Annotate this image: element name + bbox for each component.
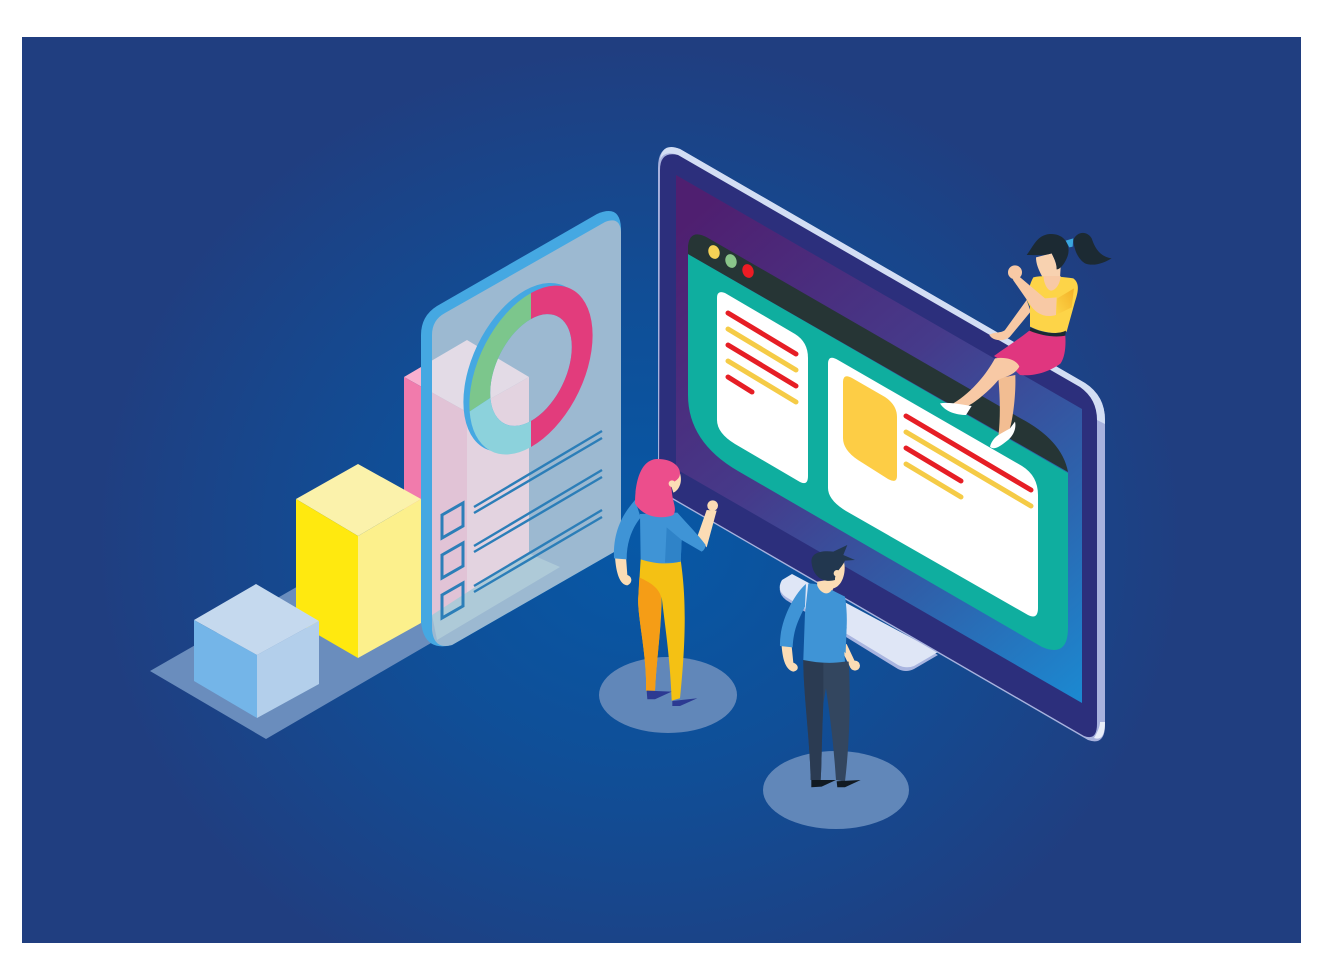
browser window (688, 234, 1068, 650)
window teal body (688, 254, 1068, 650)
person: man (780, 545, 861, 787)
window control dots (706, 244, 756, 279)
sitter skirt (994, 331, 1066, 375)
sitter lower leg (998, 375, 1015, 437)
monitor top highlight (660, 147, 1105, 424)
woman pants (638, 559, 685, 701)
woman right forearm (697, 510, 717, 547)
checkbox 3 and lines (442, 510, 602, 618)
man shoes (811, 780, 861, 787)
panel: translucent document (421, 211, 621, 646)
donut green segment (469, 293, 531, 412)
donut blue edge (463, 256, 587, 479)
donut cyan segment (470, 375, 531, 482)
floor disc: woman (599, 657, 737, 733)
checkbox 2 and lines (442, 470, 602, 578)
sitter raised arm (1013, 277, 1057, 316)
man hair (811, 545, 855, 581)
man left hand (782, 646, 798, 672)
sitter upper leg (953, 358, 1019, 407)
monitor bezel (659, 154, 1097, 737)
man sweater (803, 583, 847, 663)
sitter supporting arm (989, 300, 1031, 340)
monitor corner glint (1094, 722, 1105, 739)
woman pants shade (638, 577, 661, 691)
woman ear (669, 480, 675, 487)
sitter neck (1043, 276, 1061, 291)
sitter hair tie (1066, 238, 1073, 247)
sitter shirt shade (1056, 288, 1074, 315)
donut pink segment (531, 258, 593, 447)
man trousers shade (803, 660, 823, 780)
sitter ponytail (1073, 233, 1112, 265)
woman pink hair (635, 459, 680, 517)
card left (717, 292, 808, 483)
man sweater right sleeve (839, 627, 847, 653)
window title bar (688, 234, 1068, 472)
donut chart (463, 252, 593, 485)
sitter shirt (1027, 276, 1078, 333)
bar chart: blue cube (194, 584, 319, 718)
woman left sleeve (614, 500, 641, 559)
man sweater sleeve (780, 584, 806, 647)
person: woman with pink hair (614, 459, 718, 706)
monitor (658, 147, 1105, 741)
sitter face (1036, 253, 1061, 278)
bar chart: pink bar (404, 340, 529, 595)
man right hand (840, 644, 855, 668)
floor disc: man (763, 751, 909, 829)
checkbox 1 and lines (442, 431, 602, 538)
document blue edge (421, 211, 621, 646)
card right (828, 358, 1038, 616)
woman sweater (640, 513, 706, 563)
monitor screen (676, 175, 1082, 703)
document face with bar seen through (432, 220, 621, 646)
ground strip (150, 502, 560, 739)
man neck and face (817, 562, 845, 594)
monitor stand (780, 574, 938, 671)
checklist (442, 431, 602, 618)
sitter belt (1029, 327, 1066, 337)
sitter fist (1008, 265, 1022, 279)
woman face (670, 473, 681, 493)
woman fist (707, 500, 718, 511)
woman sweater shade (665, 527, 682, 563)
monitor frame rim (658, 148, 1105, 741)
woman left hand (615, 557, 631, 585)
person: woman sitting on monitor (940, 233, 1112, 448)
man trousers (803, 660, 850, 782)
bar chart: yellow bar (296, 464, 421, 658)
man fist (850, 661, 860, 671)
woman shoes (647, 691, 697, 706)
sitter hair (1027, 234, 1069, 269)
man ear (834, 570, 840, 577)
sitter shoes (940, 403, 1015, 448)
